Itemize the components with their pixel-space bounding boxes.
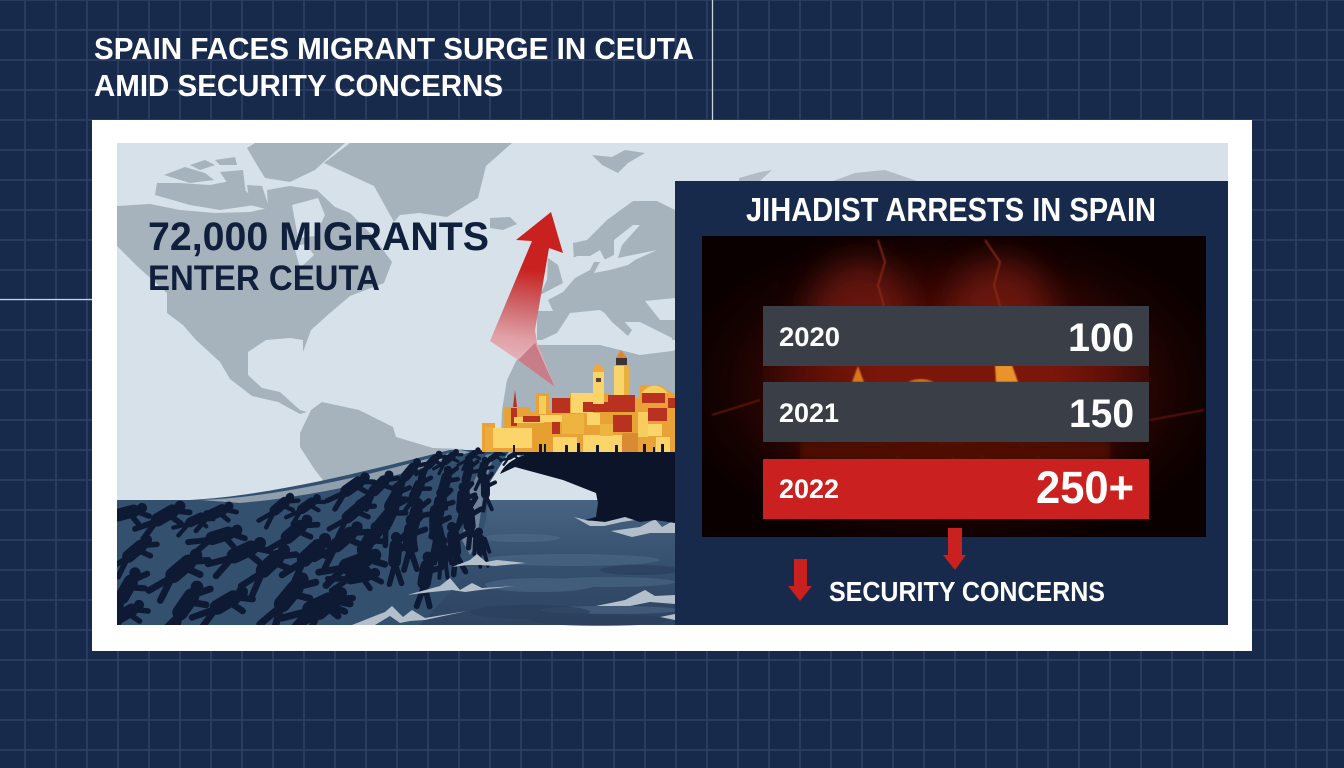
icon: city of Ceuta [482,350,675,452]
wave and crowd of migrants [117,447,523,625]
lava backdrop [702,236,1206,537]
title: AMID SECURITY CONCERNS [94,68,503,103]
heading: JIHADIST ARRESTS IN SPAIN [746,191,1156,228]
cliff under the city [500,452,675,523]
security concerns label: SECURITY CONCERNS [829,576,1105,607]
stat: migrants entering Ceuta: ENTER CEUTA [148,259,380,298]
foam crests [352,512,675,625]
ocean [117,500,680,626]
bar: 2021 [763,382,1149,442]
panel: jihadist arrests [675,181,1228,625]
bar: 2020: 2020 [779,322,840,352]
map land: Britain, Italy and Africa [500,258,675,455]
bar: 2022: 2022 [779,474,839,504]
title: SPAIN FACES MIGRANT SURGE IN CEUTA [94,31,694,66]
bar: 2021: 150 [1069,392,1134,436]
bar: 2021: 2021 [779,398,839,428]
bar: 2022 [763,459,1149,519]
panel: white frame [92,120,1252,651]
map inland seas [292,198,675,355]
bar: 2020 [763,306,1149,366]
arrow: down from 2022 bar [943,528,966,570]
map land masses [117,143,917,493]
stat: migrants entering Ceuta [148,215,489,298]
bar: 2020: 100 [1068,316,1134,360]
panel: world map illustration [117,143,1228,625]
arrow: down beside security concerns [788,559,812,601]
title [94,31,694,103]
stat: migrants entering Ceuta: 72,000 MIGRANTS [148,215,489,259]
arrow: migration route [490,212,563,387]
bar: 2022: 250+ [1036,462,1134,513]
